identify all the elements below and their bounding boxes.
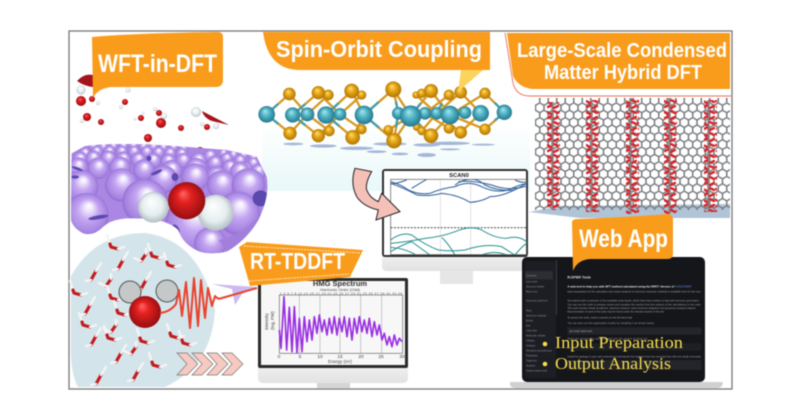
callout: Large-Scale Condensed Matter Hybrid DFT	[505, 33, 731, 96]
monitor: band structure	[382, 169, 528, 284]
screen contents: A web-tool to help you with DFT method calculated using the RPET. Version of	[567, 284, 674, 288]
screen contents: Trajectory	[526, 360, 538, 363]
bonds	[267, 89, 504, 141]
callout: Large-Scale Condensed Matter Hybrid DFT: Large-Scale Condensed	[517, 39, 727, 62]
callout tail	[458, 70, 483, 92]
lattice floor	[529, 204, 730, 218]
laptop base	[510, 382, 723, 388]
chart: HMG spectrum	[279, 295, 403, 353]
x axis ticks: 0	[278, 354, 281, 360]
callout: RT-TDDFT	[239, 242, 363, 286]
screen contents: Orbitals	[526, 340, 535, 343]
x axis ticks: 10	[317, 354, 323, 360]
gold atoms lower	[283, 123, 491, 148]
y axis label: Intensity	[264, 312, 269, 330]
screen contents: Output viewer tools	[526, 370, 548, 373]
screen contents: Documentation of each of the tools may be found under the relevant section of the site	[567, 310, 665, 313]
monitor chin	[258, 366, 408, 383]
panel: spin-orbit crystal structure	[258, 81, 512, 157]
screen contents: PySCF/MRT	[675, 284, 692, 288]
solute: red sphere with rings	[119, 280, 178, 328]
monitor: HMG spectrum	[258, 278, 408, 388]
water molecule: big	[138, 182, 234, 231]
callout: WFT-in-DFT: WFT-in-DFT	[98, 50, 217, 78]
chart title: SCAN0	[449, 173, 469, 179]
callout: Spin-Orbit Coupling: Spin-Orbit Coupling	[276, 36, 482, 62]
x axis ticks: 20	[358, 354, 364, 360]
chevrons	[177, 353, 243, 375]
screen contents: Spectrum analysis	[526, 315, 547, 318]
screen contents: Install the package in your own environment and launch the interface from the command line with one single command	[567, 355, 701, 358]
stand	[440, 271, 473, 284]
screen contents: pip install rdpbr-tools	[569, 330, 593, 333]
screen contents: Overview	[526, 275, 537, 278]
screen contents: Analysis	[526, 365, 536, 368]
red oxygen columns	[547, 98, 717, 214]
substrate shadow	[283, 142, 495, 157]
laser pulse wave	[160, 278, 257, 328]
top axis label: Harmonic Order (Odd)	[320, 287, 361, 292]
laptop screen	[522, 257, 705, 382]
laptop web app	[510, 257, 723, 388]
callout: RT-TDDFT: RT-TDDFT	[250, 248, 345, 274]
bullet: output analysis	[543, 362, 547, 366]
x axis ticks: 5	[299, 354, 302, 360]
screen contents: You can also run this application locally by installing it as shown below	[567, 322, 654, 325]
screen contents: Input preparation for the calculation and output analysis of electronic structure methods is available here for the user	[567, 291, 701, 294]
screen contents: Input tools	[526, 281, 538, 284]
water molecules in solution	[70, 235, 196, 385]
screen contents: The tools include orbital visualizers, spectrum plotters, band structure diagrams and geometry analysis helpers	[567, 307, 696, 310]
label: output analysis: Output Analysis	[555, 354, 671, 373]
bullet: input preparation	[543, 342, 547, 346]
screen contents: Cube files	[526, 330, 538, 333]
screen contents: Dos	[526, 325, 531, 328]
callout: WFT-in-DFT	[92, 32, 223, 98]
frame	[69, 31, 732, 389]
callout: Spin-Orbit Coupling	[263, 32, 490, 92]
screen contents: Tools are grouped by workflow and use the output of each run	[567, 337, 648, 340]
panel: water droplet circle	[71, 233, 215, 387]
screen contents: You can use the tools to prepare inputs and visualize the results from the outputs of the calculations in the code	[567, 303, 701, 306]
screen contents: Structure builder	[526, 285, 544, 288]
top axis ticks: 1 3 5 7 9 11 13 15 17 19 21 23 25 27 29 31 33 35 37 39 41 43 45	[280, 292, 402, 296]
screen contents: Population	[526, 355, 538, 358]
callout: Large-Scale Condensed Matter Hybrid DFT: Matter Hybrid DFT	[544, 61, 702, 84]
callout: Web App	[572, 214, 673, 271]
screen contents: Get started with a selection of the available tools below, which have been written to help with structure generation	[567, 299, 700, 302]
screen contents: Charges	[526, 345, 536, 348]
x axis ticks: 30	[399, 354, 405, 360]
callout: Web App: Web App	[579, 225, 668, 253]
gold atoms upper	[283, 81, 491, 100]
sidebar	[525, 261, 556, 378]
panel: water molecule on metal surface	[70, 143, 268, 254]
screen contents	[525, 260, 702, 373]
screen contents: Vibrations and phonons	[526, 350, 553, 353]
panel: hybrid DFT lattice	[529, 98, 730, 218]
chart: SCAN0 bands	[391, 179, 527, 260]
chin	[382, 255, 528, 271]
screen contents: R-DPBR Tools	[567, 275, 591, 279]
screen contents: To access the tools, select a section on the left hand side	[567, 316, 633, 319]
screen contents: Bands	[526, 320, 534, 323]
chart title: HMG Spectrum	[313, 279, 367, 288]
x axis ticks	[278, 354, 405, 360]
screen contents: Basis sets	[526, 291, 538, 294]
screen contents: Molecular orbitals	[526, 335, 546, 338]
pale cyan backdrop	[262, 125, 530, 191]
y axis unit: (log, PW)	[270, 311, 275, 330]
screen contents: Geometry optimizer	[526, 300, 548, 303]
honeycomb lattice	[535, 98, 730, 210]
panel: WFT-in-DFT gas phase molecules	[76, 75, 229, 155]
monitor stand	[317, 383, 350, 388]
laser fan	[212, 284, 257, 305]
screen contents: Plots	[526, 310, 532, 313]
x axis label: Energy (eV)	[328, 359, 353, 364]
curved arrow	[353, 168, 400, 220]
teal atoms	[258, 105, 512, 127]
label: input preparation: Input Preparation	[555, 333, 684, 352]
x axis ticks: 25	[378, 354, 384, 360]
x axis ticks: 15	[337, 354, 343, 360]
